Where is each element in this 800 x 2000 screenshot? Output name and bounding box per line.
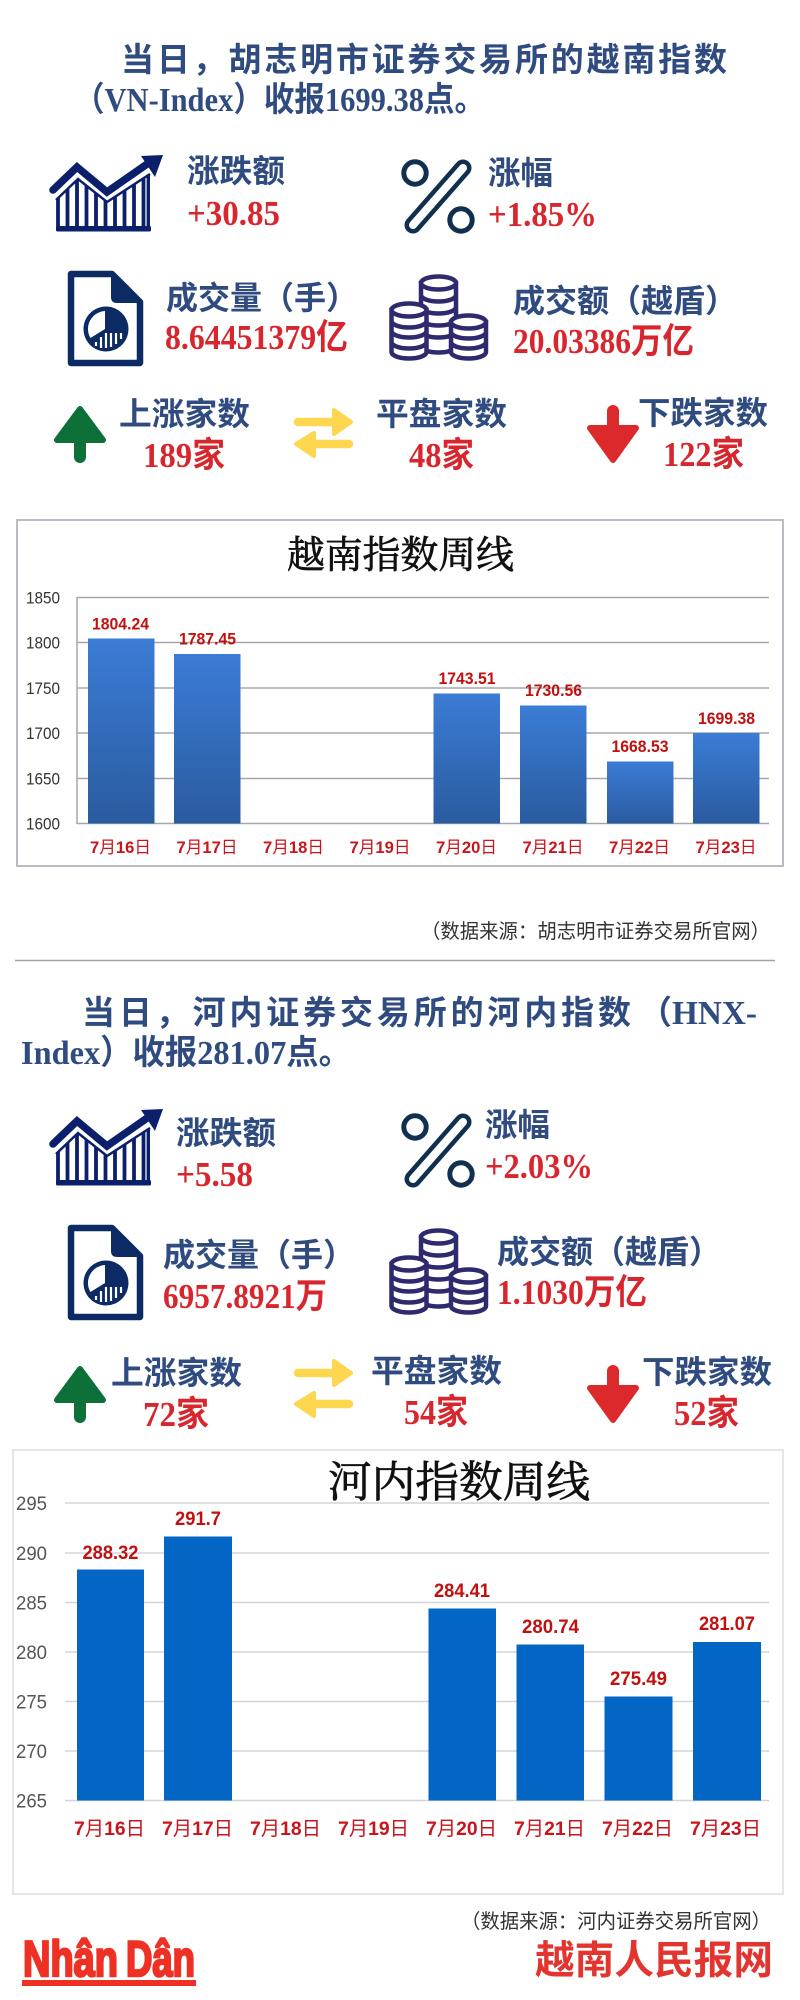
value: advancers: 72家 — [143, 1395, 209, 1434]
x axis labels: 7月23日 — [690, 1818, 761, 1840]
y axis labels: 1650 — [26, 770, 60, 788]
bar value labels: 281.07 — [699, 1614, 755, 1635]
label: change amount: 涨跌额 — [176, 1115, 276, 1151]
y axis labels — [16, 1494, 47, 1812]
label: change amount: 涨跌额 — [187, 153, 285, 189]
label: decliners: 下跌家数 — [642, 1354, 772, 1390]
value: unchanged: 48家 — [409, 436, 474, 475]
value: change amount: +30.85 — [187, 194, 280, 233]
icon: coin stacks — [392, 1230, 486, 1312]
stat: decliners HNX — [590, 1354, 772, 1433]
bar value labels: 288.32 — [82, 1543, 138, 1564]
label: volume: 成交量（手） — [163, 1237, 355, 1273]
y axis labels: 1700 — [26, 724, 60, 743]
y axis labels: 270 — [16, 1742, 47, 1763]
source note: VN-Index: （数据来源：胡志明市证券交易所官网） — [421, 920, 770, 943]
stat: turnover — [392, 276, 737, 361]
y axis labels: 265 — [16, 1792, 47, 1812]
icon: document with pie chart — [71, 274, 140, 363]
x axis labels: 7月17日 — [176, 838, 238, 857]
label: change percent: 涨幅 — [485, 1107, 550, 1143]
y axis labels: 1850 — [26, 588, 60, 608]
x axis labels — [90, 838, 756, 857]
value: turnover: 20.03386万亿 — [513, 322, 694, 361]
heading: VN-Index: 当日，胡志明市证券交易所的越南指数 — [121, 42, 727, 79]
panel: HNX-Index weekly bar chart — [13, 1450, 783, 1894]
y axis labels: 280 — [16, 1643, 47, 1664]
label: turnover: 成交额（越盾） — [497, 1234, 721, 1270]
bar value labels: 291.7 — [175, 1509, 221, 1530]
icon: up arrow — [57, 409, 103, 457]
label: advancers: 上涨家数 — [111, 1355, 242, 1391]
bar value labels — [82, 1509, 755, 1690]
y axis labels: 1800 — [26, 634, 60, 652]
x axis labels: 7月18日 — [263, 838, 324, 857]
icon: percent — [404, 162, 472, 231]
x axis labels — [74, 1818, 761, 1840]
icon: down arrow — [590, 411, 636, 460]
x axis labels: 7月17日 — [162, 1818, 233, 1840]
heading: HNX-Index: Index）收报281.07点。 — [21, 1034, 351, 1072]
label: unchanged: 平盘家数 — [371, 1353, 502, 1389]
label: turnover: 成交额（越盾） — [513, 283, 737, 319]
x axis labels: 7月23日 — [696, 838, 756, 857]
bar value labels: 275.49 — [610, 1669, 667, 1690]
y axis labels: 285 — [16, 1594, 47, 1614]
x axis labels: 7月19日 — [350, 838, 410, 857]
x axis labels: 7月22日 — [609, 838, 670, 857]
stat: volume HNX — [71, 1228, 355, 1317]
label: decliners: 下跌家数 — [638, 395, 768, 431]
heading: VN-Index — [74, 42, 727, 119]
brand: Vietnam People's Daily website: 越南人民报网 — [535, 1939, 773, 1983]
stat: volume — [71, 274, 358, 363]
heading: HNX-Index — [21, 995, 757, 1072]
bar value labels: 1804.24 — [92, 614, 150, 634]
heading: HNX-Index: 当日，河内证券交易所的河内指数 — [82, 995, 631, 1032]
value: turnover: 1.1030万亿 — [497, 1273, 647, 1312]
value: advancers: 189家 — [143, 436, 225, 475]
value: volume: 6957.8921万 — [163, 1277, 327, 1316]
label: unchanged: 平盘家数 — [376, 396, 507, 432]
chart title: 越南指数周线 — [287, 535, 514, 577]
label: advancers: 上涨家数 — [119, 396, 250, 432]
y axis labels: 290 — [16, 1544, 47, 1565]
y axis labels — [26, 588, 60, 834]
value: volume: 8.64451379亿 — [165, 318, 348, 357]
bar value labels: 1787.45 — [179, 630, 236, 648]
heading: VN-Index: （VN-Index）收报1699.38点。 — [74, 81, 485, 119]
stat: change percent — [404, 155, 597, 234]
stat: change amount — [53, 153, 285, 233]
x axis labels: 7月19日 — [338, 1818, 409, 1840]
icon: swap arrows — [296, 1361, 351, 1416]
stat: advancers — [57, 396, 250, 475]
x axis labels: 7月16日 — [74, 1818, 145, 1840]
bar value labels: 284.41 — [434, 1581, 490, 1602]
icon: coin stacks — [392, 276, 486, 358]
x axis labels: 7月21日 — [522, 838, 584, 857]
value: decliners: 122家 — [663, 435, 744, 474]
stat: advancers HNX — [57, 1355, 242, 1434]
x axis labels: 7月16日 — [90, 838, 151, 857]
y axis labels: 1750 — [26, 679, 60, 698]
icon: down arrow — [590, 1371, 636, 1420]
x axis labels: 7月21日 — [514, 1818, 585, 1840]
bar value labels — [92, 614, 755, 756]
label: change percent: 涨幅 — [488, 155, 553, 191]
y axis labels: 295 — [16, 1494, 47, 1515]
icon: swap arrows — [296, 410, 351, 456]
value: unchanged: 54家 — [404, 1393, 468, 1432]
value: change amount: +5.58 — [176, 1155, 253, 1194]
icon: document with pie chart — [71, 1228, 140, 1317]
logo: Nhan Dan: Nhân — [23, 1931, 118, 1987]
icon: rising chart — [53, 155, 163, 232]
stat: change percent HNX — [404, 1107, 593, 1186]
label: volume: 成交量（手） — [166, 280, 358, 316]
chart title: 河内指数周线 — [328, 1460, 590, 1507]
bar value labels: 1699.38 — [698, 709, 755, 728]
value: change percent: +1.85% — [488, 195, 597, 234]
value: decliners: 52家 — [674, 1394, 739, 1433]
value: change percent: +2.03% — [485, 1147, 593, 1186]
x axis labels: 7月20日 — [426, 1818, 497, 1840]
bar value labels: 1668.53 — [612, 737, 668, 756]
x axis labels: 7月18日 — [250, 1818, 321, 1840]
heading: HNX-Index: HNX- — [672, 995, 757, 1032]
bar value labels: 1730.56 — [525, 681, 582, 700]
x axis labels: 7月22日 — [602, 1818, 673, 1840]
stat: decliners — [590, 395, 768, 474]
icon: up arrow — [57, 1369, 103, 1417]
stat: change amount HNX — [53, 1109, 276, 1194]
stat: unchanged HNX — [296, 1353, 502, 1432]
stat: turnover HNX — [392, 1230, 721, 1312]
logo: Nhan Dan: Dân — [126, 1931, 195, 1987]
bar value labels: 280.74 — [522, 1617, 579, 1638]
bars — [77, 1536, 761, 1800]
icon: rising chart — [53, 1109, 163, 1186]
source note: HNX-Index: （数据来源：河内证券交易所官网） — [461, 1910, 771, 1933]
heading: HNX-Index: （ — [639, 996, 672, 1032]
bars — [88, 638, 760, 824]
x axis labels: 7月20日 — [436, 838, 497, 857]
y axis labels: 275 — [16, 1692, 47, 1714]
bar value labels: 1743.51 — [438, 669, 496, 688]
icon: percent — [404, 1116, 472, 1185]
stat: unchanged — [296, 396, 507, 475]
y axis labels: 1600 — [26, 814, 60, 834]
panel: VN-Index weekly bar chart — [17, 520, 783, 866]
